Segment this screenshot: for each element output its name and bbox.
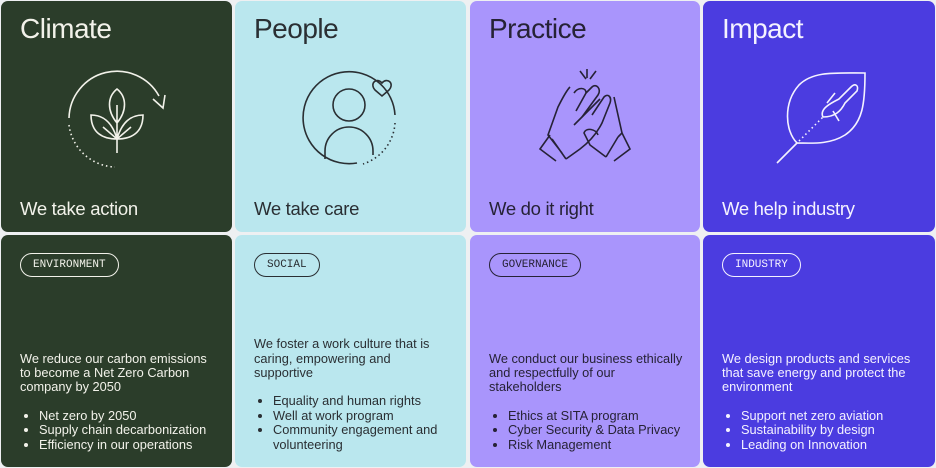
- icon: high five hands: [539, 69, 631, 162]
- tag: environment: [20, 253, 119, 277]
- panel: environment: [1, 235, 232, 467]
- icon: plant with cycle arrow: [68, 70, 166, 168]
- text: social body: [254, 336, 437, 452]
- text: social body: Equality and human rights: [273, 393, 421, 408]
- subtitle: We take action: [20, 198, 138, 219]
- panel: governance: [470, 235, 700, 467]
- icon: person in circle with heart: [302, 70, 396, 165]
- text: environment body: Supply chain decarbonization: [39, 422, 206, 437]
- text: industry body: environment: [722, 379, 792, 394]
- tag: industry: INDUSTRY: [735, 259, 788, 271]
- icon: leaf with plane: [776, 72, 866, 164]
- text: governance body: stakeholders: [489, 379, 562, 394]
- panel: climate: [1, 1, 232, 232]
- tag: social: SOCIAL: [267, 259, 307, 271]
- subtitle: We take care: [254, 198, 359, 219]
- tag: industry: [722, 253, 801, 277]
- tag: social: [254, 253, 320, 277]
- text: industry body: Leading on Innovation: [741, 437, 867, 452]
- panel: people: [235, 1, 466, 232]
- text: governance body: [489, 351, 682, 452]
- text: governance body: We conduct our business ethically: [489, 351, 682, 366]
- panel: practice: [470, 1, 700, 232]
- text: social body: Community engagement and: [273, 422, 437, 437]
- panel: social: [235, 235, 466, 467]
- tag: governance: GOVERNANCE: [502, 259, 568, 271]
- text: environment body: to become a Net Zero Carbon: [20, 365, 189, 380]
- title: people: People: [254, 13, 338, 44]
- text: industry body: that save energy and protect the: [722, 365, 906, 380]
- subtitle: We help industry: [722, 198, 855, 219]
- text: governance body: Ethics at SITA program: [508, 408, 639, 423]
- text: industry body: Support net zero aviation: [741, 408, 883, 423]
- text: environment body: We reduce our carbon emissions: [20, 351, 207, 366]
- text: industry body: Sustainability by design: [741, 422, 875, 437]
- subtitle: We do it right: [489, 198, 593, 219]
- title: climate: Climate: [20, 13, 111, 44]
- text: social body: caring, empowering and: [254, 351, 391, 366]
- tag: governance: [489, 253, 581, 277]
- text: industry body: [722, 351, 910, 452]
- text: environment body: [20, 351, 207, 452]
- text: social body: supportive: [254, 365, 313, 380]
- text: governance body: Risk Management: [508, 437, 611, 452]
- text: social body: Well at work program: [273, 408, 394, 423]
- text: environment body: Efficiency in our operations: [39, 437, 192, 452]
- title: practice: Practice: [489, 13, 586, 44]
- text: environment body: Net zero by 2050: [39, 408, 136, 423]
- text: governance body: and respectfully of our: [489, 365, 615, 380]
- text: governance body: Cyber Security & Data Privacy: [508, 422, 680, 437]
- text: social body: volunteering: [273, 437, 343, 452]
- tag: environment: ENVIRONMENT: [33, 259, 106, 271]
- panel: impact: [703, 1, 935, 232]
- text: environment body: company by 2050: [20, 379, 121, 394]
- panel: industry: [703, 235, 935, 467]
- title: impact: Impact: [722, 13, 803, 44]
- text: social body: We foster a work culture that is: [254, 336, 429, 351]
- text: industry body: We design products and services: [722, 351, 910, 366]
